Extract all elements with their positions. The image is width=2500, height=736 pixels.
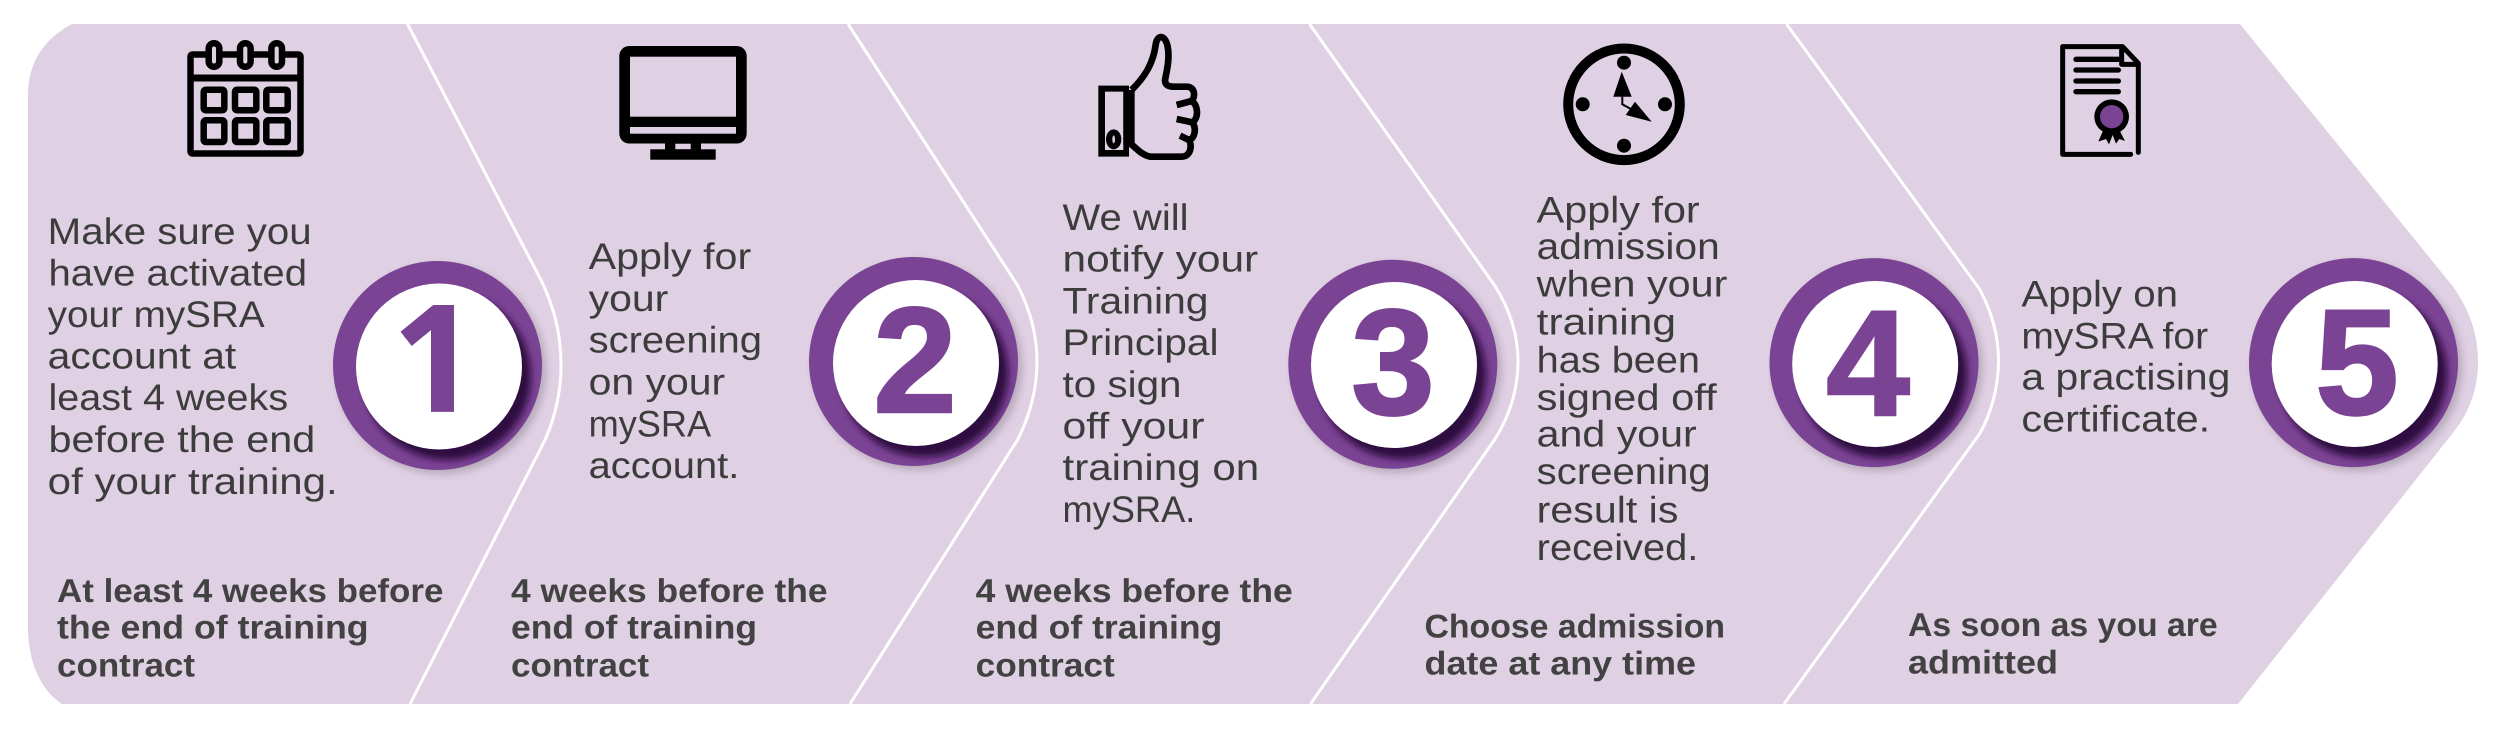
number badge 2 bbox=[809, 257, 1022, 470]
number badge 3: 3 bbox=[1351, 278, 1435, 446]
step 4 description: result is bbox=[1537, 489, 1678, 530]
step 2 timing: end of training bbox=[511, 608, 757, 646]
step 1 description: before the end bbox=[48, 419, 315, 460]
number badge 3 bbox=[1288, 260, 1501, 473]
step 4 description: training bbox=[1537, 301, 1676, 342]
step 2 timing bbox=[511, 572, 828, 684]
step 3 description: off your bbox=[1062, 406, 1204, 446]
step 3 timing bbox=[976, 572, 1293, 684]
step 3 timing: contract bbox=[976, 646, 1115, 684]
step 2 description bbox=[589, 236, 762, 486]
step 1 description: have activated bbox=[48, 252, 307, 294]
step 1 timing: At least 4 weeks before bbox=[57, 572, 443, 609]
white chevron dividers bbox=[408, 24, 1998, 704]
step 4 description: received. bbox=[1537, 527, 1698, 568]
step 1 description bbox=[48, 211, 338, 502]
step 3 description bbox=[1062, 197, 1259, 530]
step 2 description: screening bbox=[589, 320, 762, 361]
step 4 description: when your bbox=[1536, 264, 1727, 305]
step 2 timing: contract bbox=[511, 646, 649, 684]
step 5 description: Apply on bbox=[2021, 274, 2178, 315]
panel: step 5 bbox=[1908, 47, 2462, 681]
step 3 description: mySRA. bbox=[1062, 489, 1195, 530]
step 5 timing: As soon as you are bbox=[1908, 606, 2218, 643]
step 1 timing: the end of training bbox=[57, 608, 369, 646]
icon: certificate bbox=[2063, 47, 2138, 154]
step 4 timing: date at any time bbox=[1424, 645, 1696, 682]
step 4 description: and your bbox=[1537, 414, 1697, 455]
step 4 description: has been bbox=[1537, 339, 1700, 380]
step 5 description: a practising bbox=[2021, 357, 2230, 398]
panel: step 2 bbox=[511, 46, 1022, 684]
step 2 timing: 4 weeks before the bbox=[511, 572, 828, 609]
panel: step 4 bbox=[1424, 49, 1982, 682]
step 4 description: admission bbox=[1537, 226, 1720, 267]
step 2 description: Apply for bbox=[589, 236, 751, 277]
step 2 description: account. bbox=[589, 445, 739, 486]
step 5 timing bbox=[1908, 606, 2218, 681]
step 4 description: Apply for bbox=[1537, 189, 1700, 230]
step 5 description: mySRA for bbox=[2021, 315, 2208, 356]
step 5 description: certificate. bbox=[2021, 398, 2210, 440]
step 2 description: mySRA bbox=[589, 404, 711, 445]
number badge 2: 2 bbox=[873, 276, 957, 444]
step 3 description: Principal bbox=[1062, 322, 1218, 363]
step 1 timing: contract bbox=[57, 646, 195, 684]
step 5 timing: admitted bbox=[1908, 644, 2058, 681]
panel: step 3 bbox=[976, 37, 1501, 683]
step 3 description: notify your bbox=[1062, 238, 1258, 279]
icon: clock bbox=[1568, 49, 1680, 160]
step 3 description: training on bbox=[1062, 447, 1259, 488]
step 3 timing: end of training bbox=[976, 608, 1222, 646]
icon: thumbs up bbox=[1098, 37, 1197, 157]
step 1 description: Make sure you bbox=[48, 211, 312, 252]
step 1 description: least 4 weeks bbox=[48, 377, 288, 418]
step 1 description: account at bbox=[48, 336, 237, 376]
number badge 1: 1 bbox=[390, 275, 474, 443]
step 4 timing: Choose admission bbox=[1424, 608, 1725, 644]
step 2 description: your bbox=[589, 278, 668, 319]
step 2 description: on your bbox=[589, 361, 725, 402]
step 4 description bbox=[1536, 189, 1727, 568]
step 1 description: your mySRA bbox=[48, 294, 265, 335]
number badge 5: 5 bbox=[2315, 278, 2399, 446]
step 4 description: screening bbox=[1537, 451, 1711, 492]
step 3 description: Training bbox=[1062, 281, 1208, 322]
number badge 5 bbox=[2249, 258, 2462, 471]
step 1 timing bbox=[57, 572, 443, 684]
step 1 description: of your training. bbox=[48, 461, 338, 502]
step 4 timing bbox=[1424, 608, 1725, 682]
number badge 1 bbox=[333, 261, 546, 474]
number badge 4 bbox=[1770, 258, 1982, 471]
number badge 4: 4 bbox=[1826, 279, 1910, 447]
icon: monitor bbox=[619, 46, 747, 160]
step 3 description: to sign bbox=[1062, 364, 1182, 405]
step 3 description: We will bbox=[1062, 197, 1188, 238]
panel: step 1 bbox=[48, 43, 546, 683]
icon: calendar bbox=[190, 43, 301, 154]
step 3 timing: 4 weeks before the bbox=[976, 572, 1293, 609]
step 5 description bbox=[2021, 274, 2230, 440]
step 4 description: signed off bbox=[1537, 377, 1718, 418]
